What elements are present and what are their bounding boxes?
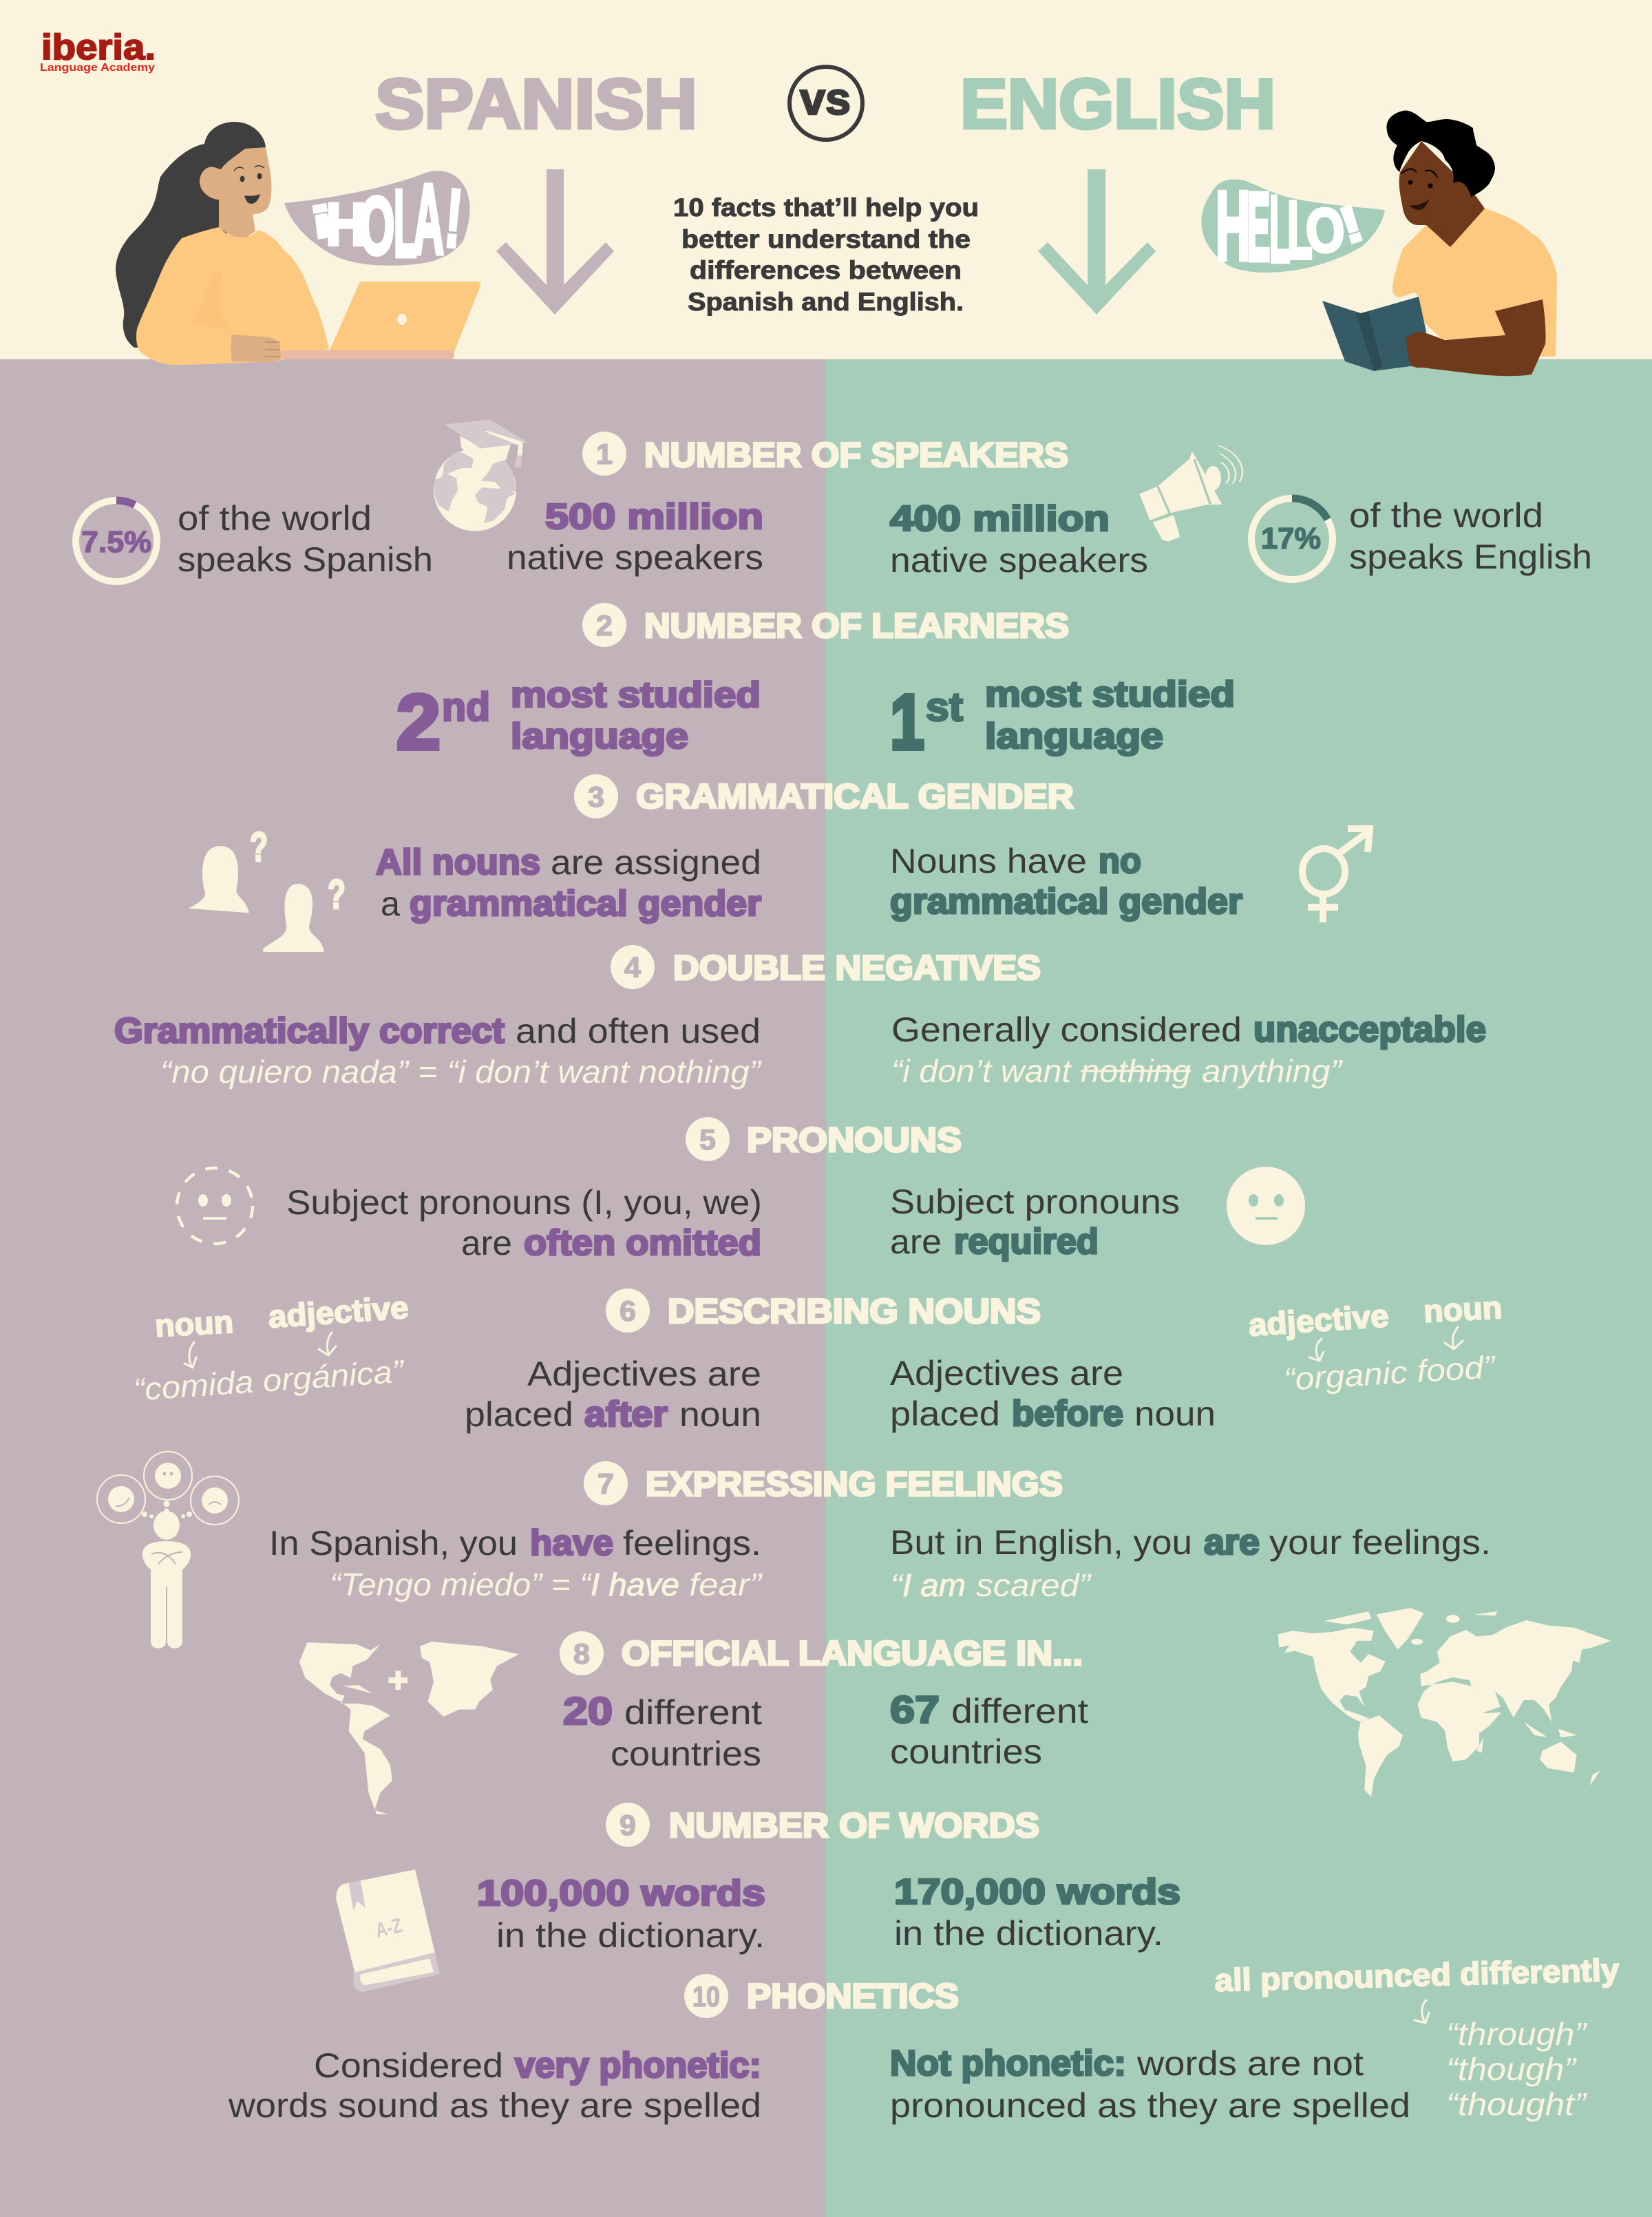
heading: expressing feelings: EXPRESSING FEELINGS: [646, 1465, 1063, 1503]
icon: dictionary book: A-Z: [373, 1914, 405, 1942]
title: english: ENGLISH: [960, 65, 1275, 143]
logo: iberia.: [41, 28, 156, 67]
chart: 7.5 percent donut: [76, 500, 157, 582]
text: english phonetics: Not phonetic:: [890, 2044, 1126, 2083]
text: spanish grammatical gender: [376, 842, 761, 924]
speech bubble: hola: A: [413, 165, 444, 275]
text: spanish double negatives: Grammatically correct: [114, 1011, 505, 1051]
section 2: number of learners: [396, 603, 1235, 765]
text: spanish feelings: “Tengo miedo” = “: [330, 1567, 593, 1602]
section 1: number of speakers: [76, 419, 1592, 582]
text: english 1st most studied: [890, 675, 1235, 765]
speech bubble: hello: !: [1333, 193, 1370, 255]
illustration: man reading a book: [1322, 111, 1557, 376]
text: spanish 2nd most studied: language: [511, 717, 688, 756]
text: spanish pronouns: Subject pronouns (I, you, we): [286, 1183, 762, 1222]
text: spanish 2nd most studied: most studied: [511, 675, 761, 715]
icon: vs badge: vs: [800, 73, 851, 124]
arrow: english down: [1038, 169, 1156, 315]
heading: pronouns: PRONOUNS: [747, 1121, 962, 1159]
text: english countries: 67: [890, 1688, 940, 1731]
text: spanish adjectives: Adjectives are: [527, 1355, 761, 1393]
text: english native speakers: 400 million: [890, 499, 1110, 539]
heading: phonetics: [684, 1974, 959, 2018]
heading: number of speakers: 1: [596, 438, 613, 470]
text: spanish adjectives: noun: [679, 1395, 761, 1434]
heading: pronouns: 5: [699, 1123, 716, 1156]
heading: double negatives: DOUBLE NEGATIVES: [673, 948, 1041, 987]
callout: all pronounced differently: “thought”: [1446, 2086, 1588, 2122]
text: english grammatical gender: Nouns have: [890, 842, 1087, 880]
callout: comida organica: [132, 1289, 410, 1408]
icon: vs badge: [790, 67, 862, 140]
chart: 7.5 percent donut: 7.5%: [81, 525, 151, 559]
section 6: describing nouns: [132, 1288, 1503, 1434]
text: spanish feelings: feelings.: [623, 1524, 761, 1562]
chart: 17 percent donut: 17%: [1261, 522, 1321, 555]
text: spanish feelings: fear”: [689, 1567, 763, 1602]
text: spanish phonetics: Considered: [314, 2046, 503, 2085]
chart: 17 percent donut: [1251, 498, 1333, 580]
callout: organic food: adjective: [1247, 1297, 1390, 1343]
callout: all pronounced differently: “though”: [1446, 2051, 1578, 2087]
speech bubble: hello: E: [1247, 173, 1270, 282]
speech bubble: hola: !: [442, 172, 466, 265]
text: english double negatives: “i don’t want: [891, 1053, 1072, 1089]
text: english grammatical gender: grammatical gender: [890, 882, 1242, 922]
text: english pronouns: Subject pronouns: [890, 1182, 1180, 1221]
section 3: grammatical gender: [188, 774, 1370, 952]
text: spanish grammatical gender: All nouns: [376, 842, 540, 882]
heading: pronouns: [686, 1117, 962, 1161]
text: english countries: [890, 1688, 1088, 1771]
text: english feelings: I am: [902, 1567, 966, 1603]
heading: number of learners: 2: [596, 609, 613, 641]
text: english feelings: your feelings.: [1269, 1523, 1491, 1562]
text: spanish phonetics: words sound as they are spelled: [228, 2086, 761, 2125]
text: spanish pronouns: are: [461, 1224, 512, 1262]
text: spanish countries: [563, 1689, 762, 1773]
icon: silhouettes with question marks: ?: [250, 824, 268, 870]
section 10: phonetics: [228, 1952, 1620, 2125]
speech bubble: hello: O: [1303, 195, 1348, 267]
heading: phonetics: 10: [692, 1980, 720, 2013]
heading: double negatives: 4: [624, 951, 642, 984]
speech bubble: hola: [284, 165, 470, 277]
heading: expressing feelings: 7: [597, 1467, 614, 1500]
text: english feelings: [890, 1523, 1491, 1603]
arrow: spanish down: [496, 169, 614, 315]
speech bubble: hello: L: [1287, 184, 1313, 275]
callout: all pronounced differently: “through”: [1446, 2016, 1588, 2052]
text: spanish world share: speaks Spanish: [178, 540, 433, 579]
text: spanish word count: in the dictionary.: [496, 1916, 765, 1955]
speech bubble: hello: L: [1269, 176, 1291, 282]
speech bubble: hola: ¡: [304, 187, 338, 242]
text: spanish world share: of the world: [178, 499, 372, 538]
text: english pronouns: required: [954, 1222, 1099, 1262]
text: english adjectives: [890, 1354, 1216, 1434]
icon: solid face: [1227, 1167, 1305, 1245]
icon: dashed face: [177, 1168, 253, 1244]
callout: comida organica: “comida orgánica”: [132, 1353, 407, 1408]
text: english world share: of the world: [1349, 496, 1543, 535]
speech bubble: hello: [1201, 171, 1385, 282]
speech bubble: hola: O: [359, 181, 394, 272]
icon: silhouettes with question marks: ?: [328, 871, 346, 917]
heading: phonetics: PHONETICS: [747, 1977, 959, 2015]
text: spanish word count: 100,000 words: [477, 1874, 765, 1913]
title: spanish: SPANISH: [375, 65, 697, 143]
section 7: expressing feelings: [97, 1452, 1491, 1648]
intro text: Spanish and English.: [688, 288, 964, 316]
text: spanish grammatical gender: a: [381, 884, 400, 923]
text: spanish phonetics: very phonetic:: [515, 2046, 761, 2086]
text: english feelings: But in English, you: [890, 1523, 1192, 1562]
text: english phonetics: words are not: [1136, 2044, 1364, 2083]
callout: organic food: [1247, 1289, 1503, 1397]
panel: english column: [826, 359, 1652, 2217]
icon: silhouettes with question marks: [188, 824, 346, 952]
text: spanish word count: [477, 1874, 765, 1955]
icon: person with emotion bubbles: [97, 1452, 239, 1648]
text: spanish world share: [178, 499, 433, 579]
text: english double negatives: [891, 1010, 1486, 1089]
text: english world share: [1349, 496, 1592, 576]
text: english countries: different: [951, 1692, 1088, 1730]
text: english phonetics: pronounced as they are spelled: [890, 2086, 1410, 2125]
text: english 1st most studied: 1: [890, 679, 924, 765]
heading: grammatical gender: 3: [588, 781, 604, 813]
text: spanish 2nd most studied: [396, 675, 761, 765]
text: english double negatives: unacceptable: [1253, 1010, 1486, 1050]
text: spanish native speakers: [507, 497, 763, 577]
text: spanish countries: different: [624, 1693, 762, 1732]
heading: official language in: 8: [573, 1637, 590, 1670]
text: english world share: speaks English: [1349, 538, 1592, 576]
text: spanish grammatical gender: are assigned: [551, 843, 761, 882]
text: spanish double negatives: “no quiero nada” = “i don’t want nothing”: [160, 1054, 763, 1090]
heading: number of learners: NUMBER OF LEARNERS: [644, 606, 1069, 645]
icon: globe with graduation cap: [434, 419, 528, 531]
text: english grammatical gender: no: [1099, 841, 1141, 881]
text: spanish pronouns: [286, 1183, 762, 1263]
heading: number of words: 9: [620, 1809, 636, 1841]
text: english adjectives: Adjectives are: [890, 1354, 1123, 1392]
heading: grammatical gender: GRAMMATICAL GENDER: [636, 777, 1074, 816]
text: english adjectives: placed: [890, 1394, 1000, 1433]
text: english word count: in the dictionary.: [894, 1914, 1163, 1953]
text: spanish adjectives: placed: [465, 1395, 573, 1434]
section 8: official language in: [299, 1608, 1611, 1814]
speech bubble: hola: L: [394, 171, 417, 277]
section 4: double negatives: [114, 945, 1486, 1090]
text: spanish 2nd most studied: nd: [442, 685, 490, 730]
callout: organic food: “organic food”: [1282, 1348, 1498, 1397]
heading: official language in: OFFICIAL LANGUAGE IN...: [622, 1634, 1083, 1673]
text: english word count: [894, 1872, 1180, 1953]
speech bubble: hello: H: [1216, 171, 1251, 280]
logo: Language Academy: [40, 62, 155, 74]
text: english feelings: scared”: [976, 1567, 1092, 1603]
intro text: 10 facts that’ll help you: [673, 193, 979, 222]
section 9: number of words: [336, 1803, 1180, 1992]
text: spanish double negatives: and often used: [516, 1012, 761, 1050]
heading: number of speakers: NUMBER OF SPEAKERS: [644, 436, 1068, 474]
text: spanish grammatical gender: grammatical gender: [410, 884, 761, 924]
text: english 1st most studied: most studied: [985, 675, 1235, 714]
intro text: [673, 193, 979, 316]
text: spanish phonetics: [228, 2046, 761, 2125]
icon: dictionary book: [336, 1869, 440, 1992]
section 5: pronouns: [177, 1117, 1305, 1263]
text: english 1st most studied: st: [926, 685, 963, 730]
text: spanish pronouns: often omitted: [524, 1223, 761, 1263]
text: spanish feelings: have: [530, 1523, 613, 1563]
text: english double negatives: nothing: [1081, 1053, 1191, 1089]
illustration: woman with laptop: [116, 122, 480, 365]
intro text: better understand the: [681, 225, 971, 253]
text: spanish feelings: [269, 1523, 763, 1602]
callout: all pronounced differently: all pronounced differently: [1214, 1952, 1620, 1998]
icon: megaphone: [1139, 445, 1242, 542]
text: english grammatical gender: [890, 841, 1242, 922]
icon: map of the americas plus spain: [299, 1642, 518, 1814]
panel: spanish column: [0, 359, 826, 2217]
text: english native speakers: native speakers: [890, 541, 1148, 580]
text: english feelings: are: [1204, 1523, 1260, 1562]
text: english pronouns: are: [890, 1222, 942, 1261]
text: english 1st most studied: language: [985, 717, 1163, 756]
text: english phonetics: [890, 2044, 1410, 2125]
icon: world map: [1278, 1608, 1611, 1796]
text: english pronouns: [890, 1182, 1180, 1262]
text: english feelings: “: [890, 1567, 904, 1603]
callout: all pronounced differently: [1214, 1952, 1620, 2122]
callout: comida organica: adjective: [267, 1289, 410, 1335]
text: spanish double negatives: [114, 1011, 763, 1090]
text: spanish countries: countries: [611, 1735, 761, 1773]
icon: gender symbol: [1302, 829, 1370, 922]
text: spanish feelings: In Spanish, you: [269, 1524, 518, 1562]
text: spanish adjectives: [465, 1355, 761, 1434]
text: english word count: 170,000 words: [894, 1872, 1180, 1912]
text: spanish native speakers: native speakers: [507, 538, 763, 577]
text: english adjectives: before: [1012, 1394, 1123, 1434]
text: spanish feelings: I have: [591, 1567, 679, 1602]
heading: describing nouns: DESCRIBING NOUNS: [668, 1292, 1041, 1330]
heading: number of words: NUMBER OF WORDS: [669, 1806, 1039, 1845]
text: spanish 2nd most studied: 2: [396, 679, 441, 765]
text: english double negatives: Generally considered: [891, 1010, 1242, 1049]
speech bubble: hola: H: [326, 191, 366, 258]
text: spanish native speakers: 500 million: [545, 497, 763, 537]
text: spanish adjectives: after: [584, 1394, 668, 1434]
text: english native speakers: [890, 499, 1148, 580]
intro text: differences between: [690, 256, 962, 284]
callout: organic food: noun: [1423, 1289, 1503, 1329]
callout: comida organica: noun: [154, 1304, 234, 1344]
text: english adjectives: noun: [1134, 1394, 1216, 1433]
heading: describing nouns: 6: [620, 1295, 636, 1327]
text: english double negatives: anything”: [1202, 1053, 1344, 1089]
text: english countries: countries: [890, 1732, 1042, 1771]
text: spanish countries: 20: [563, 1689, 613, 1732]
